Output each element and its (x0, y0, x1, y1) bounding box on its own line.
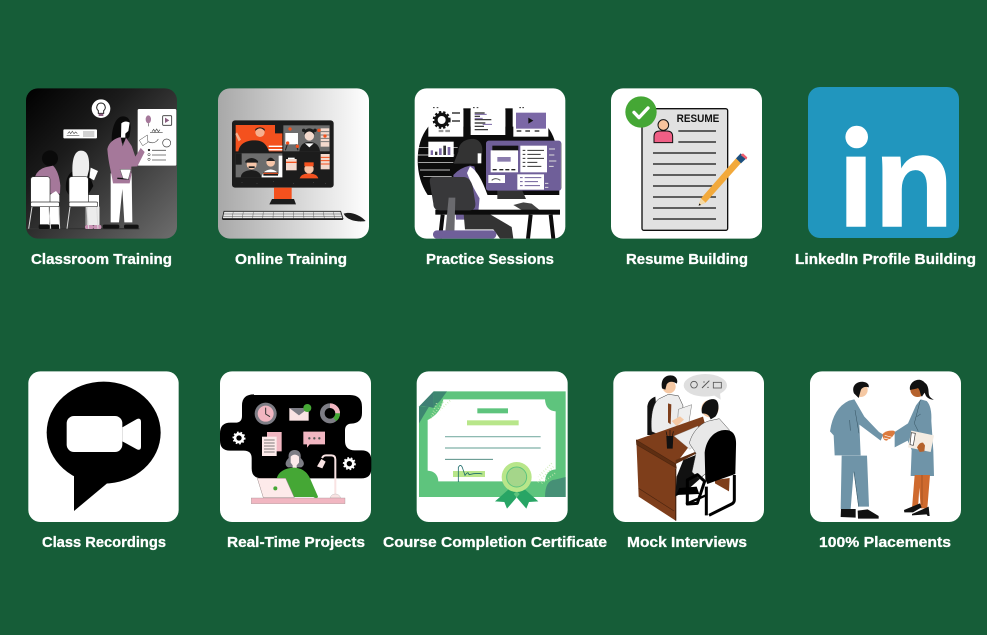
label: online training: Online Training (235, 251, 347, 268)
panel: classroom training (26, 88, 177, 268)
student one (42, 150, 58, 166)
panel: linkedin profile building (795, 87, 976, 268)
illustration: interview at desk (613, 371, 764, 522)
panel: practice sessions (415, 88, 565, 268)
student two (66, 169, 93, 194)
panel: course completion certificate (383, 371, 607, 551)
panel: real-time projects (220, 371, 371, 551)
illustration: certificate (417, 371, 568, 522)
panel: mock interviews (613, 371, 764, 551)
panel: 100% placements (810, 371, 961, 551)
label: course completion certificate: Course Completion Certificate (383, 534, 607, 551)
label: resume building: Resume Building (626, 251, 748, 268)
illustration: video call monitor (218, 88, 369, 239)
illustration: resume (611, 88, 762, 239)
label: classroom training: Classroom Training (31, 251, 172, 268)
illustration: handshake (810, 371, 961, 522)
label: linkedin profile building: LinkedIn Profile Building (795, 251, 976, 268)
illustration: classroom (26, 88, 177, 239)
illustration: project workspace (220, 371, 371, 522)
icon: linkedin logo: in (838, 108, 954, 254)
label: mock interviews: Mock Interviews (627, 534, 747, 551)
label: practice sessions: Practice Sessions (426, 251, 554, 268)
panel: online training (218, 88, 369, 268)
panel: class recordings (28, 371, 179, 551)
label: real-time projects: Real-Time Projects (227, 534, 365, 551)
icon: linkedin logo (808, 87, 959, 254)
label: class recordings: Class Recordings (42, 534, 166, 551)
label: 100% placements: 100% Placements (819, 534, 951, 551)
infographic canvas (26, 87, 976, 550)
teacher (112, 116, 131, 144)
icon: video chat bubble (28, 371, 179, 522)
illustration: person at computer (415, 88, 565, 239)
panel: resume building (611, 88, 762, 268)
illustration: resume: RESUME (677, 113, 719, 125)
